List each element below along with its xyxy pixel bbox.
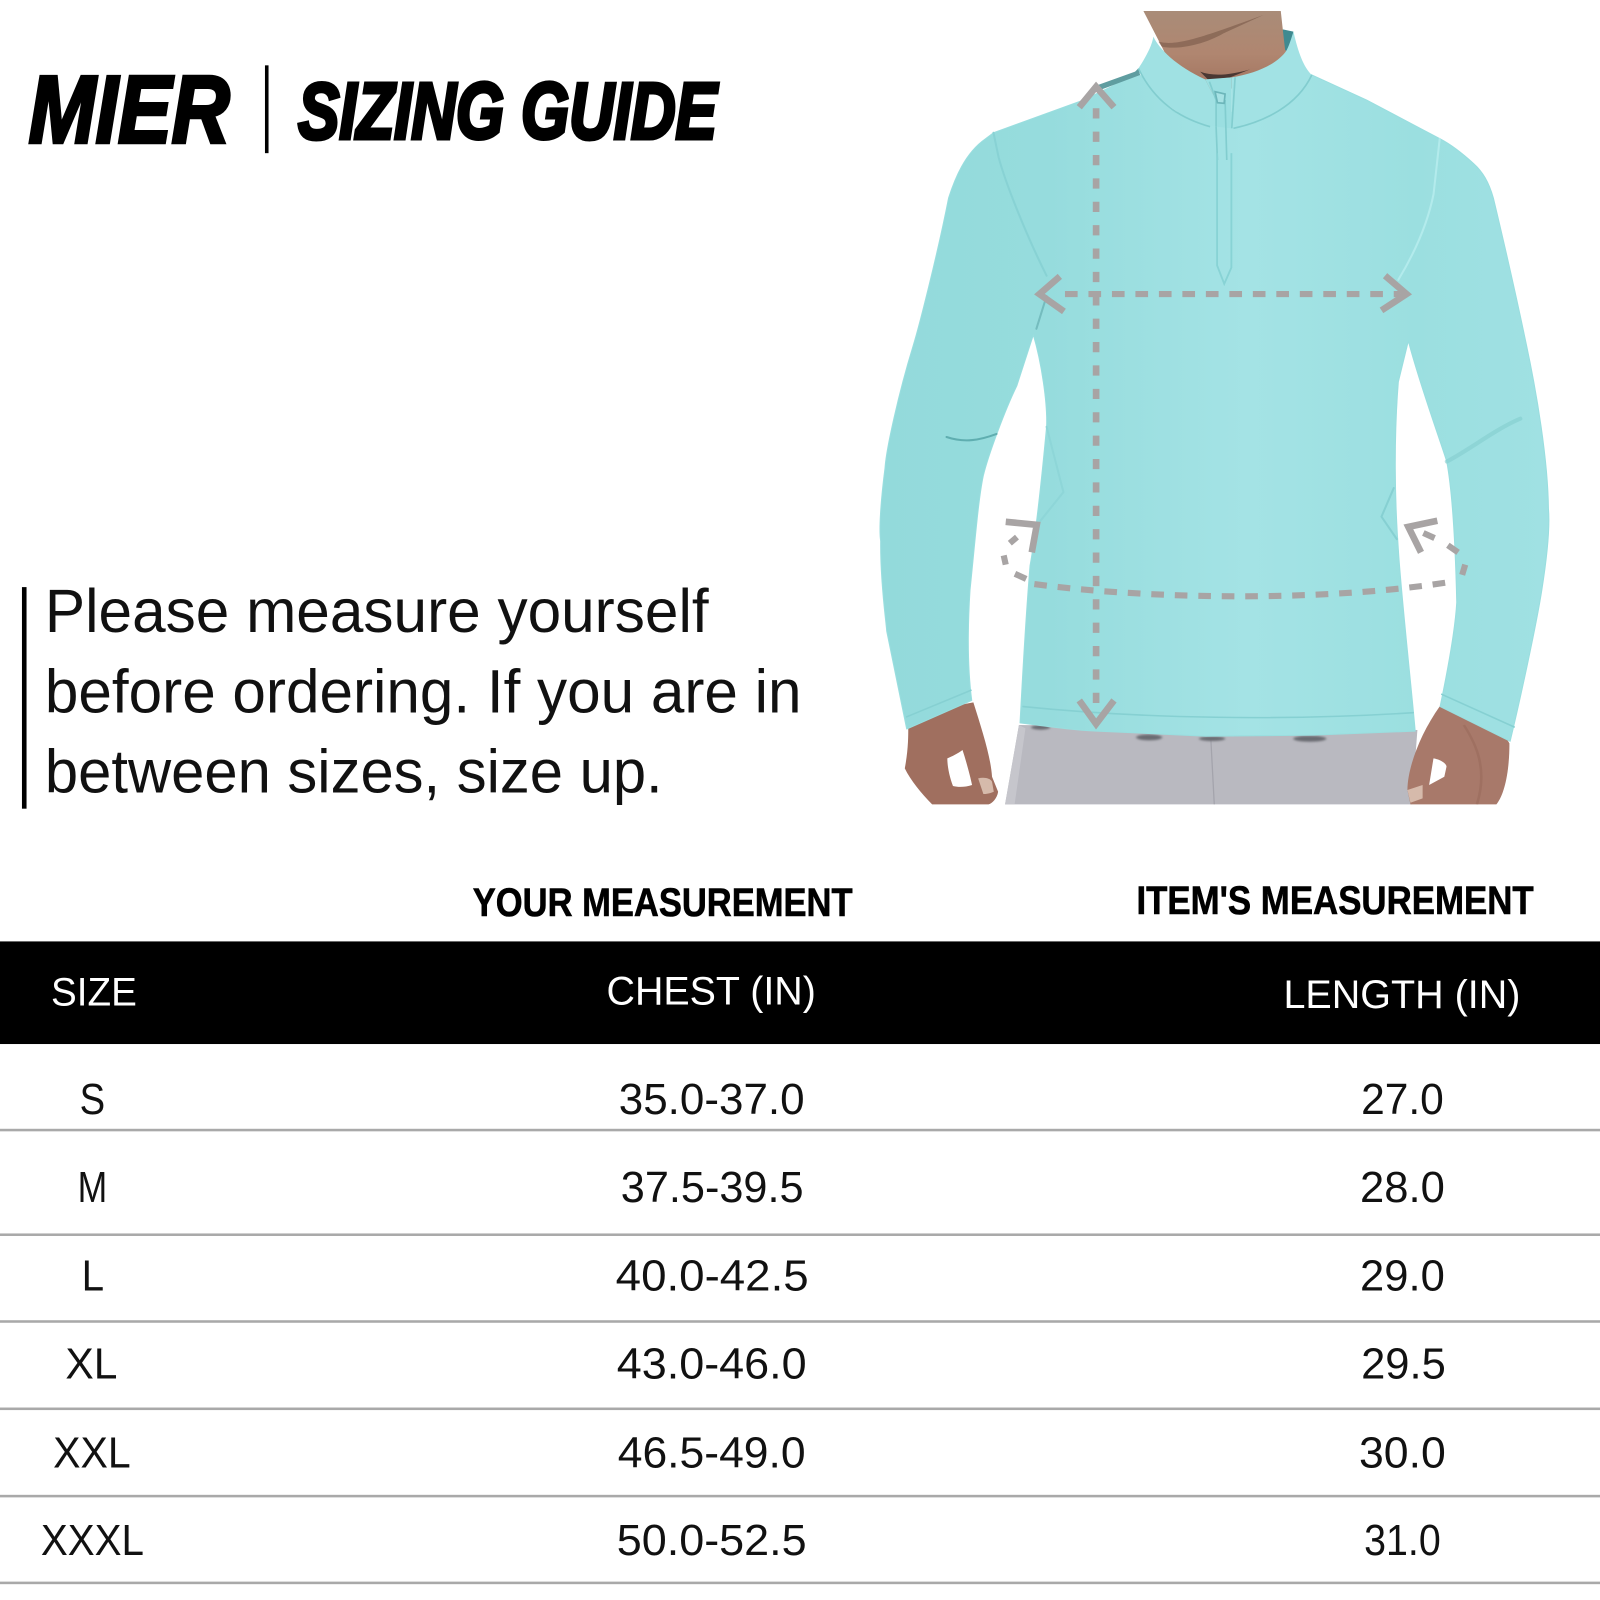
- row L: L: [82, 1252, 104, 1301]
- row XXXL: 31.0: [1364, 1516, 1441, 1565]
- note text: [45, 577, 802, 805]
- note text: between sizes, size up.: [45, 737, 663, 805]
- row S: [0, 1075, 1600, 1131]
- row M: M: [78, 1163, 107, 1212]
- your measurement heading: YOUR MEASUREMENT: [473, 881, 853, 925]
- row XXXL: XXXL: [41, 1516, 144, 1565]
- collar and zipper: [1095, 32, 1312, 160]
- table header band: [0, 941, 1600, 1044]
- row XL: 29.5: [1361, 1339, 1446, 1388]
- row M: [0, 1163, 1600, 1236]
- row XXL: 46.5-49.0: [618, 1428, 806, 1477]
- note text: before ordering. If you are in: [45, 658, 802, 726]
- size table: [0, 941, 1600, 1584]
- shirt seams and creases: [907, 133, 1520, 727]
- title: SIZING GUIDE: [298, 66, 719, 155]
- table header band: SIZE: [51, 971, 137, 1015]
- row S: S: [80, 1075, 105, 1124]
- intro note: [22, 577, 802, 809]
- shorts and hands: [905, 702, 1509, 804]
- item's measurement heading: ITEM'S MEASUREMENT: [1136, 879, 1534, 923]
- table rows: [0, 1075, 1600, 1584]
- row XL: [0, 1339, 1600, 1410]
- row L: 29.0: [1360, 1252, 1445, 1301]
- zipper placket: [1217, 153, 1231, 284]
- length measurement arrow: [1079, 87, 1114, 724]
- hem measurement loop: [1004, 521, 1465, 596]
- row M: 28.0: [1360, 1163, 1445, 1212]
- row XXXL: 50.0-52.5: [617, 1516, 807, 1565]
- table header band: LENGTH (IN): [1283, 973, 1520, 1017]
- note text: Please measure yourself: [45, 577, 710, 645]
- row XXL: [0, 1428, 1600, 1497]
- note accent bar: [22, 587, 27, 809]
- row L: 40.0-42.5: [616, 1252, 809, 1301]
- brand name: MIER: [29, 56, 230, 163]
- row M: 37.5-39.5: [621, 1163, 804, 1212]
- row XXL: 30.0: [1359, 1428, 1446, 1477]
- row XXL: XXL: [53, 1428, 131, 1477]
- chest measurement arrow: [1039, 276, 1407, 311]
- column group headings: [473, 879, 1534, 925]
- row XL: XL: [65, 1339, 117, 1388]
- row S: 35.0-37.0: [619, 1075, 805, 1124]
- row L: [0, 1252, 1600, 1323]
- row XXXL: [0, 1516, 1600, 1584]
- shirt body and sleeves: [880, 74, 1549, 741]
- neck and chin: [1143, 11, 1293, 97]
- header: brand and title: [29, 56, 719, 163]
- header divider: [265, 65, 269, 153]
- row XL: 43.0-46.0: [617, 1339, 807, 1388]
- row S: 27.0: [1361, 1075, 1444, 1124]
- table header band: CHEST (IN): [607, 970, 816, 1014]
- illustration: model wearing teal quarter-zip: [880, 11, 1549, 804]
